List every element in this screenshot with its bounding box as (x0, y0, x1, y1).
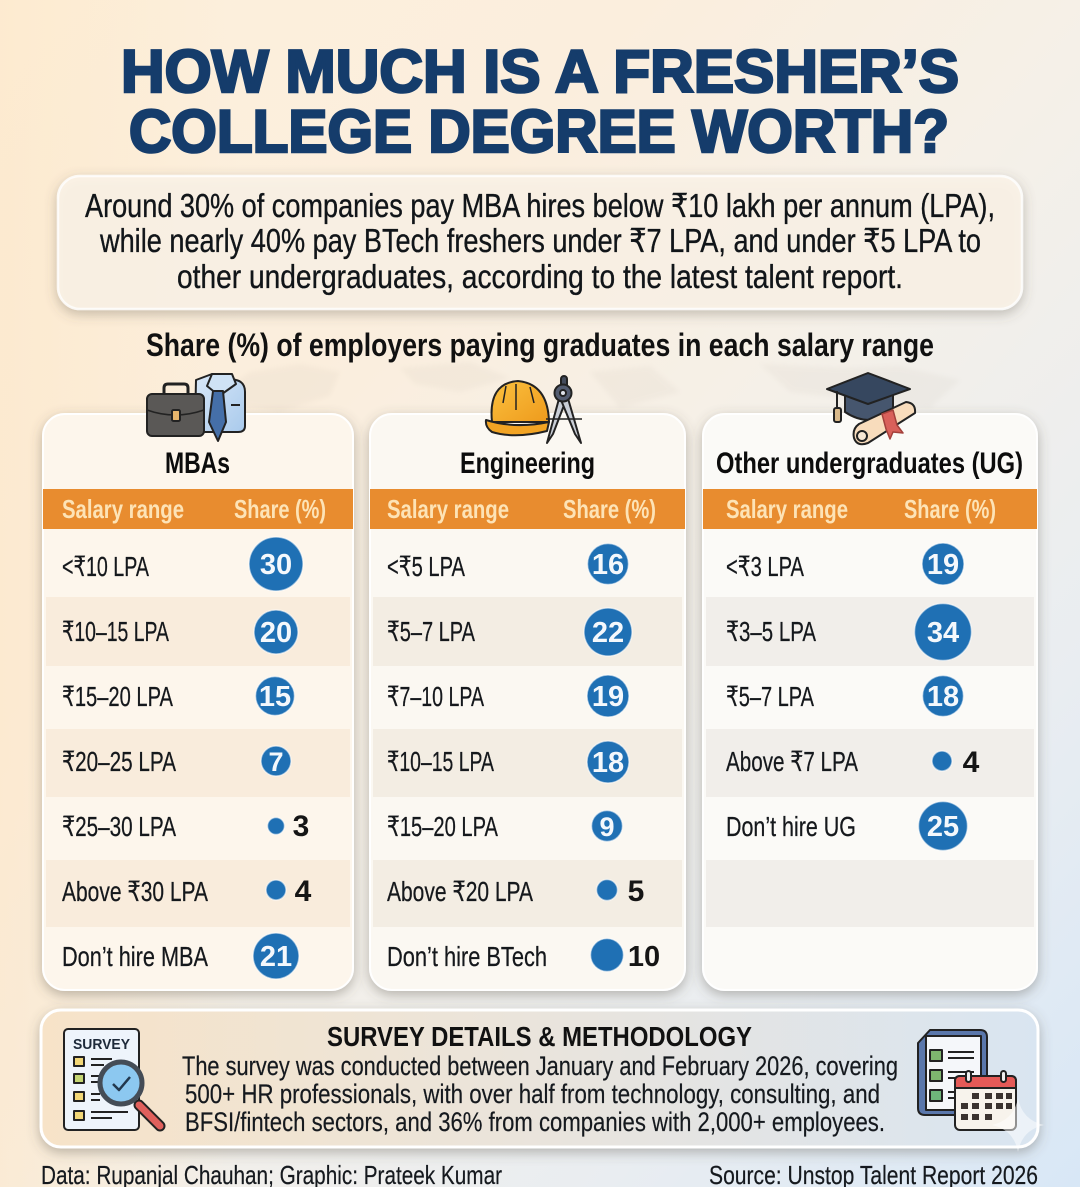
table header: MBAs: Salary range (62, 494, 184, 524)
survey text: BFSI/fintech sectors, and 36% from companies with 2,000+ employees. (185, 1107, 885, 1137)
rows: Engineering: 22 (592, 617, 624, 649)
rows: Engineering: 16 (592, 549, 624, 581)
rows: MBAs: ₹20–25 LPA (62, 746, 176, 777)
icon: survey checklist with magnifier: SURVEY (73, 1036, 130, 1053)
rows: Engineering: 19 (592, 681, 624, 713)
icon: survey checklist with magnifier (64, 1029, 160, 1130)
rows: MBAs (62, 537, 312, 979)
rows: MBAs: Above ₹30 LPA (62, 876, 208, 907)
rows: MBAs: <₹10 LPA (62, 551, 149, 582)
survey text: 500+ HR professionals, with over half from technology, consulting, and (185, 1079, 880, 1109)
rows: Other undergraduates: 19 (927, 549, 959, 581)
title (121, 38, 959, 165)
rows: Other undergraduates: Don’t hire UG (726, 811, 856, 842)
icon: briefcase and shirt (147, 374, 245, 441)
title: HOW MUCH IS A FRESHER’S (121, 38, 959, 105)
table header: Other undergraduates: Salary range (726, 494, 848, 524)
table header: MBAs: Share (%) (234, 494, 326, 524)
rows: Engineering: Above ₹20 LPA (387, 876, 533, 907)
panel: Other undergraduates (703, 414, 1037, 990)
table header: Engineering: Salary range (387, 494, 509, 524)
rows: MBAs: ₹15–20 LPA (62, 681, 173, 712)
icon: checklist and calendar (918, 1030, 1016, 1130)
panel: MBAs (43, 414, 353, 990)
survey text (182, 1051, 898, 1137)
table header: Other undergraduates (703, 489, 1037, 529)
rows: Other undergraduates: 34 (927, 617, 959, 649)
chart subtitle: Share (%) of employers paying graduates in each salary range (146, 327, 934, 363)
rows: Engineering: 9 (599, 812, 615, 842)
panel heading: Engineering: Engineering (460, 447, 595, 480)
table header: Other undergraduates: Share (%) (904, 494, 996, 524)
icon: graduation cap and scroll (827, 373, 915, 444)
survey text: The survey was conducted between January and February 2026, covering (182, 1051, 898, 1081)
rows: MBAs: ₹25–30 LPA (62, 811, 176, 842)
rows: MBAs: 20 (260, 617, 292, 649)
panel: Engineering (370, 414, 685, 990)
rows: Engineering: <₹5 LPA (387, 551, 465, 582)
rows: MBAs: 3 (293, 810, 309, 843)
title: COLLEGE DEGREE WORTH? (129, 98, 949, 165)
survey heading: SURVEY DETAILS & METHODOLOGY (327, 1021, 752, 1052)
rows: MBAs: 30 (260, 549, 292, 581)
rows: Engineering: ₹15–20 LPA (387, 811, 498, 842)
intro text panel: other undergraduates, according to the latest talent report. (177, 258, 903, 295)
rows: Other undergraduates: <₹3 LPA (726, 551, 804, 582)
icon: hard hat and compass (486, 376, 582, 443)
rows: Engineering: ₹10–15 LPA (387, 746, 494, 777)
rows: Engineering: 5 (628, 875, 644, 908)
table header: Engineering: Share (%) (563, 494, 656, 524)
rows: MBAs: 7 (268, 747, 284, 777)
rows: MBAs: 21 (260, 941, 292, 973)
rows: Engineering: 10 (628, 941, 660, 973)
rows: Other undergraduates: 25 (927, 811, 959, 843)
rows: MBAs: Don’t hire MBA (62, 941, 208, 972)
rows: Other undergraduates: 18 (927, 681, 959, 713)
table header: Engineering (370, 489, 685, 529)
rows: Engineering: ₹7–10 LPA (387, 681, 484, 712)
rows: MBAs: 15 (259, 681, 291, 713)
table header: MBAs (43, 489, 353, 529)
rows: Other undergraduates: ₹3–5 LPA (726, 616, 816, 647)
panel: survey details (41, 1010, 1038, 1147)
intro text panel (58, 176, 1022, 309)
rows: Other undergraduates: 4 (963, 746, 980, 779)
rows: Other undergraduates (726, 543, 980, 850)
rows: Other undergraduates: ₹5–7 LPA (726, 681, 814, 712)
rows: Engineering (387, 544, 660, 973)
rows: Engineering: 18 (592, 747, 624, 779)
rows: MBAs: ₹10–15 LPA (62, 616, 169, 647)
rows: MBAs: 4 (295, 875, 312, 908)
rows: Engineering: Don’t hire BTech (387, 941, 547, 972)
rows: Engineering: ₹5–7 LPA (387, 616, 475, 647)
rows: Other undergraduates: Above ₹7 LPA (726, 746, 858, 777)
sparkle (992, 1098, 1044, 1152)
panel heading: MBAs: MBAs (165, 447, 230, 480)
